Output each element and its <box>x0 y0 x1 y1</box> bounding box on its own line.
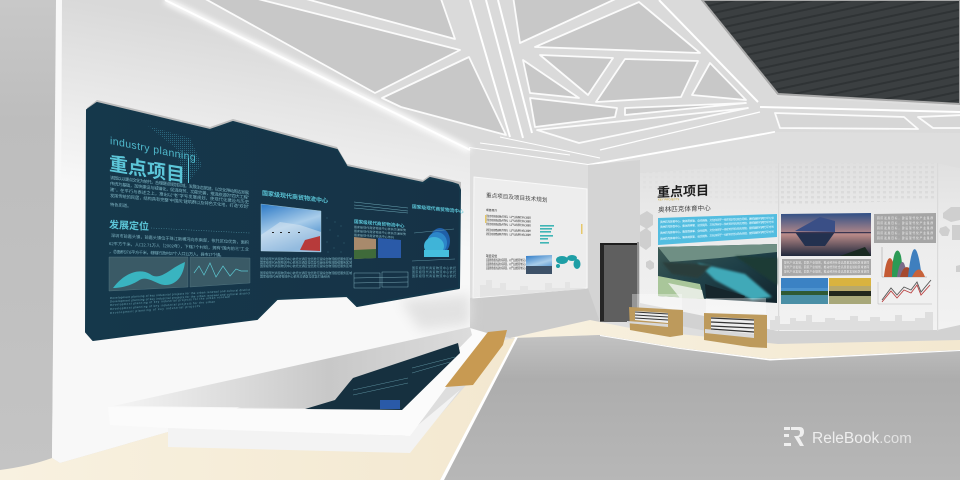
board text block: 项目定位 <box>486 254 497 258</box>
blue text box: 奥林匹克体育中心，集体育赛事、全民健身、文化休闲于一体的现代化综合场馆，建筑面积约两万平方米 <box>660 224 774 235</box>
logo <box>784 427 804 446</box>
city photo <box>354 237 376 259</box>
bell chart <box>882 247 927 277</box>
dark ceiling grille <box>702 0 960 104</box>
english text block: Development planning of key industrial projects for the urban <box>110 300 215 311</box>
world map <box>556 255 580 269</box>
grey side text box: 园区发展目标，建设现代化产业集群 <box>877 216 933 220</box>
lower wall shade <box>400 295 470 330</box>
subtitle: 奥林匹克体育中心 <box>658 203 711 214</box>
blue text box: 奥林匹克体育中心，集体育赛事、全民健身、文化休闲于一体的现代化综合场馆，建筑面积约两万平方米 <box>660 219 774 229</box>
sunset photo <box>829 278 871 304</box>
grey side text box: 园区发展目标，建设现代化产业集群 <box>877 231 933 235</box>
ceiling light panels <box>200 0 960 143</box>
grey side text box: 园区发展目标，建设现代化产业集群 <box>877 226 933 230</box>
ceiling light strip <box>165 0 470 150</box>
section paragraph: 62平方千米，人口2.71万人（2002年），下辖7个村组，拥有“国内前三”工业 <box>109 240 249 253</box>
back wall <box>470 148 640 330</box>
board text block: 园区规划建设重点项目，以产业发展为核心推进 <box>486 214 531 220</box>
mid heading: 国家级现代商贸物流中心 <box>262 189 328 205</box>
panel: right wall <box>640 132 960 345</box>
third column lines <box>354 202 408 213</box>
ceiling <box>165 0 960 165</box>
right text block <box>412 265 456 278</box>
skyline strip <box>770 312 933 330</box>
board text block: 园区规划建设重点项目，以产业发展为核心推进 <box>486 232 531 237</box>
right text block: 国家级现代商贸物流中心依托 <box>412 269 456 274</box>
watermark <box>784 427 912 447</box>
table base <box>168 390 460 453</box>
board text block: 园区规划建设重点项目，以产业发展为核心 <box>486 262 526 266</box>
main title: 重点项目 <box>109 153 185 187</box>
english title: industry planning <box>110 135 196 164</box>
sub label: KEY PROJECTS <box>658 197 679 201</box>
right text block: 国家级现代商贸物流中心依托 <box>412 265 456 270</box>
left side wall <box>0 0 60 480</box>
blue text box: 奥林匹克体育中心，集体育赛事、全民健身、文化休闲于一体的现代化综合场馆，建筑面积约两万平方米 <box>660 215 774 224</box>
intro paragraph <box>110 174 250 210</box>
blue text box: 奥林匹克体育中心，集体育赛事、全民健身、文化休闲于一体的现代化综合场馆，建筑面积约两万平方米 <box>660 229 774 241</box>
line chart <box>190 257 250 287</box>
board text block: 园区规划建设重点项目，以产业发展为核心推进 <box>486 218 531 223</box>
bench: left display bench <box>627 294 683 337</box>
board text block: 项目简介 <box>486 208 497 213</box>
grey side text box: 园区发展目标，建设现代化产业集群 <box>877 236 933 240</box>
right text block: 国家级现代商贸物流中心依托 <box>412 273 456 278</box>
board text block: 园区规划建设重点项目，以产业发展为核心 <box>486 266 526 270</box>
board text block: 园区规划建设重点项目，以产业发展为核心推进 <box>486 222 531 227</box>
bench: right display bench <box>704 298 767 348</box>
cork bar <box>445 330 507 387</box>
right heading: 国家级现代商贸物流中心 <box>412 203 464 215</box>
grey text box: 现代产业发展，园区产业规划，推动经济社会高质量发展和区域协同 <box>784 265 869 269</box>
third text block: 国家级现代商贸物流中心依托交通优势 <box>354 228 406 236</box>
mid text block: 国家级现代商贸物流中心依托交通区位优势打造综合物流枢纽服务区域 <box>260 263 352 268</box>
area chart <box>109 257 188 291</box>
english text block: Development planning of key industrial projects for the urban renewal and cultural district <box>110 291 250 303</box>
table rim <box>108 328 487 436</box>
floor wood strip <box>510 320 960 359</box>
lake photo <box>781 278 828 304</box>
mid text block: 国家级现代商贸物流中心依托交通区位优势打造综合物流枢纽服务区域 <box>260 256 352 261</box>
truck sky photo <box>261 204 321 252</box>
grey side text box: 园区发展目标，建设现代化产业集群 <box>877 221 933 225</box>
grey side text box <box>874 213 936 243</box>
third text block: 国家级现代商贸物流中心依托 <box>354 232 394 239</box>
intro paragraph: 传统为基础，加快建设与城镇化，促进商贸、功能完善，推进旅游的“四大工程” <box>110 180 250 201</box>
panel: main white wall <box>52 0 470 463</box>
reception table <box>108 327 487 453</box>
blue text box <box>658 214 777 245</box>
board heading: 重点项目及项目技术规划 <box>486 191 548 204</box>
hotel photo <box>781 213 871 256</box>
section paragraph <box>109 232 249 258</box>
english text block <box>110 288 250 315</box>
table glass top <box>113 327 472 409</box>
hex decorations <box>640 207 960 272</box>
board text block <box>486 208 531 270</box>
english text block: Development planning of key industrial projects for the urban renewal <box>110 295 230 307</box>
third text block: 国家级现代商贸物流中心依托交通优势 <box>354 224 406 232</box>
mid text block <box>260 256 352 278</box>
watermark text: ReleBook.com <box>812 430 912 447</box>
board photo <box>526 255 552 274</box>
third column text <box>354 272 408 288</box>
intro paragraph: 发挥传统的民居，结构具有完整“中国风”建筑群以及特色文化地，打造“双创” <box>110 192 250 210</box>
board text block: 园区规划建设重点项目，以产业发展为核心 <box>486 258 526 262</box>
grey text box <box>782 259 871 276</box>
grey text box: 现代产业发展，园区产业规划，推动经济社会高质量发展和区域协同 <box>784 260 869 264</box>
line chart <box>878 280 932 304</box>
hatched arrow <box>148 126 202 180</box>
skyline <box>480 280 585 297</box>
section paragraph: ，总面积37.6平方千米，辖辖行政村27个人口11万人，县市17个镇。 <box>109 248 224 258</box>
intro paragraph: 该园以以重点文化为依托，合理建设规划区域，发展生态旅游，以文化带动周边发展 <box>110 174 250 196</box>
intro paragraph: 建”，在平行与表述之上，推出以“老”字号发展规划，使现代化建设与历史 <box>110 186 250 206</box>
section heading: 发展定位 <box>109 218 149 233</box>
gray floor <box>440 335 960 480</box>
third heading: 国家级现代商贸物流中心 <box>354 218 405 230</box>
teal bars <box>540 225 554 244</box>
floor wood left <box>0 338 515 480</box>
mid text block: 国家级现代商贸物流中心依托交通区位优势打造综合物流枢纽服务区域 <box>260 260 352 264</box>
mid text block: 国家级现代商贸物流中心依托交通区位优势打造综合物流枢纽服务区域 <box>260 270 352 275</box>
screen reflection <box>305 343 460 410</box>
aerial photo <box>658 244 777 303</box>
board text block: 园区规划建设重点项目，以产业发展为核心推进 <box>486 228 531 233</box>
door <box>600 242 639 322</box>
right wall heading: 重点项目 <box>657 183 709 200</box>
cloud graphic <box>412 228 455 261</box>
panel: back wall board <box>473 177 587 298</box>
panel: dark display screen <box>86 100 464 340</box>
intro paragraph: 特色街道。 <box>110 201 131 209</box>
english text block: Development planning of key industrial projects <box>110 304 201 315</box>
section paragraph: 深圳市前嘉头镇，前嘉头镇位于珠江新横河向东南部，依托区位优势，面积 <box>111 232 249 246</box>
third text block <box>354 224 406 239</box>
mid text block: 国家级现代商贸物流中心依托交通区位优势打造综合 <box>260 274 330 278</box>
english text block: Development planning of key industrial projects for the urban renewal and cultural district <box>110 288 250 300</box>
grey text box: 现代产业发展，园区产业规划，推动经济社会高质量发展和区域协同 <box>784 270 869 274</box>
blue photo <box>378 238 401 258</box>
particle map <box>326 218 344 252</box>
